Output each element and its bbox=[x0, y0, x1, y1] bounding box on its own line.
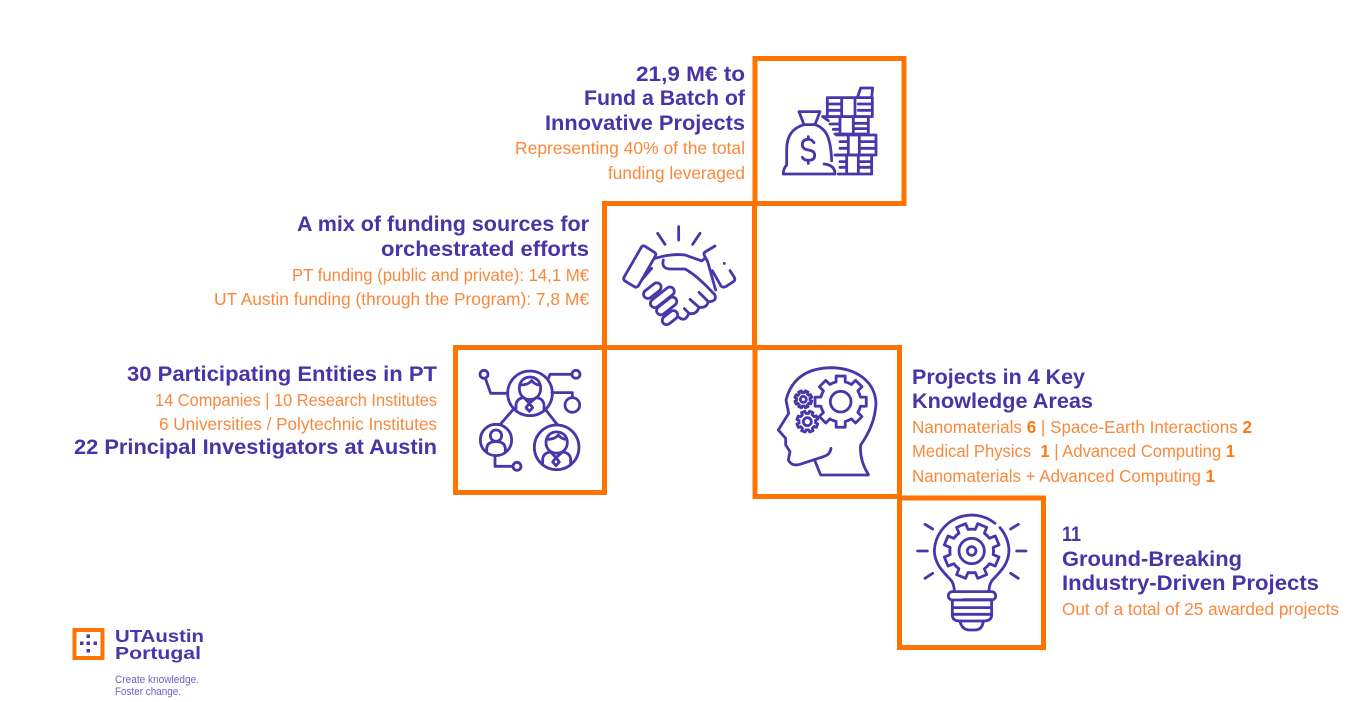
text: share of funding bbox=[515, 138, 745, 183]
text: awarded projects: Out of a total of 25 awarded projects bbox=[1062, 599, 1339, 619]
heading: knowledge areas bbox=[912, 365, 1093, 413]
heading: 21,9 M€ bbox=[545, 62, 746, 135]
heading: knowledge areas: Projects in 4 Key bbox=[912, 365, 1085, 389]
text: project counts by area bbox=[912, 417, 1252, 486]
text: project counts by area: Medical Physics 1 | Advanced Computing 1 bbox=[912, 441, 1235, 461]
text: funding amounts: PT funding (public and private): 14,1 M€ bbox=[292, 265, 589, 285]
heading: 21,9 M€: 21,9 M€ to bbox=[636, 62, 745, 86]
heading: participating entities: 30 Participating Entities in PT bbox=[127, 362, 437, 386]
heading: industry-driven projects bbox=[1062, 522, 1319, 595]
logo wordmark: UTAustin bbox=[115, 626, 204, 646]
text: share of funding: Representing 40% of the total bbox=[515, 138, 745, 158]
heading: funding mix: A mix of funding sources for bbox=[297, 212, 590, 236]
panel: funding batch bbox=[515, 58, 904, 204]
box: participating entities bbox=[456, 348, 604, 492]
heading: funding mix bbox=[297, 212, 590, 261]
text: funding amounts: UT Austin funding (through the Program): 7,8 M€ bbox=[214, 289, 589, 309]
text: entity breakdown: 14 Companies | 10 Research Institutes bbox=[155, 390, 437, 410]
icon: light bulb with gear bbox=[918, 515, 1026, 630]
logo wordmark: Portugal bbox=[115, 643, 201, 663]
text: project counts by area: Nanomaterials + Advanced Computing 1 bbox=[912, 466, 1215, 486]
logo wordmark bbox=[115, 626, 204, 663]
logo tagline bbox=[115, 674, 199, 698]
heading: funding mix: orchestrated efforts bbox=[381, 237, 589, 261]
panel: knowledge areas bbox=[755, 348, 1252, 496]
panel: participating entities bbox=[74, 348, 604, 492]
box: industry-driven projects bbox=[900, 498, 1044, 648]
text: entity breakdown bbox=[155, 390, 437, 434]
icon: head with gears bbox=[778, 368, 876, 475]
panel: funding sources bbox=[214, 204, 754, 348]
text: project counts by area: Nanomaterials 6 | Space-Earth Interactions 2 bbox=[912, 417, 1252, 437]
logo mark bbox=[74, 630, 102, 658]
heading: principal investigators: 22 Principal Investigators at Austin bbox=[74, 435, 437, 459]
box: funding sources bbox=[604, 204, 754, 348]
logo tagline: Create knowledge. bbox=[115, 674, 199, 686]
icon: money bag and coin stacks bbox=[783, 88, 876, 174]
text: share of funding: funding leveraged bbox=[608, 163, 745, 183]
text: entity breakdown: 6 Universities / Polytechnic Institutes bbox=[159, 414, 437, 434]
icon: handshake bbox=[624, 227, 735, 326]
heading: 21,9 M€: Innovative Projects bbox=[545, 111, 745, 135]
heading: industry-driven projects: 11 bbox=[1062, 522, 1081, 546]
heading: 21,9 M€: Fund a Batch of bbox=[584, 86, 746, 110]
heading: knowledge areas: Knowledge Areas bbox=[912, 389, 1093, 413]
panel: industry-driven projects bbox=[900, 498, 1339, 648]
icon: people network bbox=[480, 370, 580, 470]
logo tagline: Foster change. bbox=[115, 686, 181, 698]
box: funding batch bbox=[755, 58, 904, 204]
logo: UT Austin Portugal bbox=[74, 626, 204, 698]
box: knowledge areas bbox=[755, 348, 900, 496]
heading: industry-driven projects: Industry-Driven Projects bbox=[1062, 571, 1319, 595]
heading: industry-driven projects: Ground-Breaking bbox=[1062, 547, 1242, 571]
text: funding amounts bbox=[214, 265, 589, 309]
